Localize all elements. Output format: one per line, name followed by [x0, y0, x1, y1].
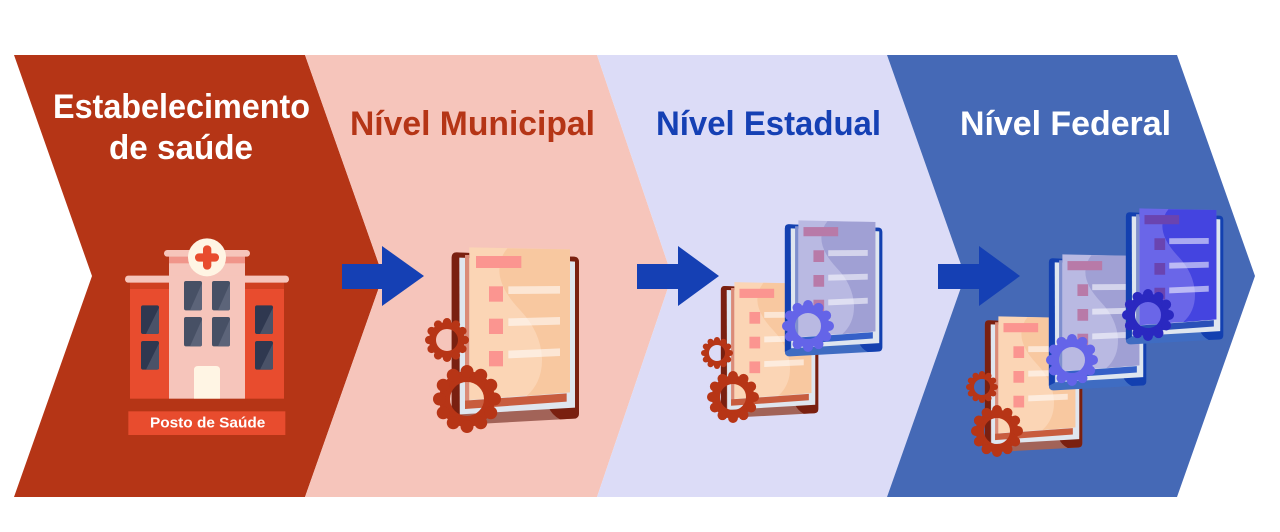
icon: hospital with sign: Posto de Saúde [150, 415, 265, 431]
heading: estabelecimento de saúde: Estabelecimento [53, 88, 310, 126]
icon: municipal form with gears [425, 247, 579, 433]
arrow: to estadual [637, 246, 719, 306]
heading: nível municipal: Nível Municipal [350, 105, 595, 143]
heading: nível estadual: Nível Estadual [656, 105, 881, 143]
icon: estadual forms with gears [701, 220, 882, 423]
icon: hospital with sign [125, 238, 289, 435]
panel: estabelecimento de saúde chevron [14, 55, 383, 497]
icon: federal forms with gears [966, 208, 1223, 457]
arrow: to federal [938, 246, 1020, 306]
panel: nível municipal chevron [305, 55, 672, 497]
heading: estabelecimento de saúde [53, 88, 310, 167]
heading: nível federal: Nível Federal [960, 105, 1171, 143]
arrow: to municipal [342, 246, 424, 306]
heading: estabelecimento de saúde: de saúde [109, 129, 253, 167]
panel: nível federal chevron [887, 55, 1255, 497]
panel: nível estadual chevron [597, 55, 965, 497]
